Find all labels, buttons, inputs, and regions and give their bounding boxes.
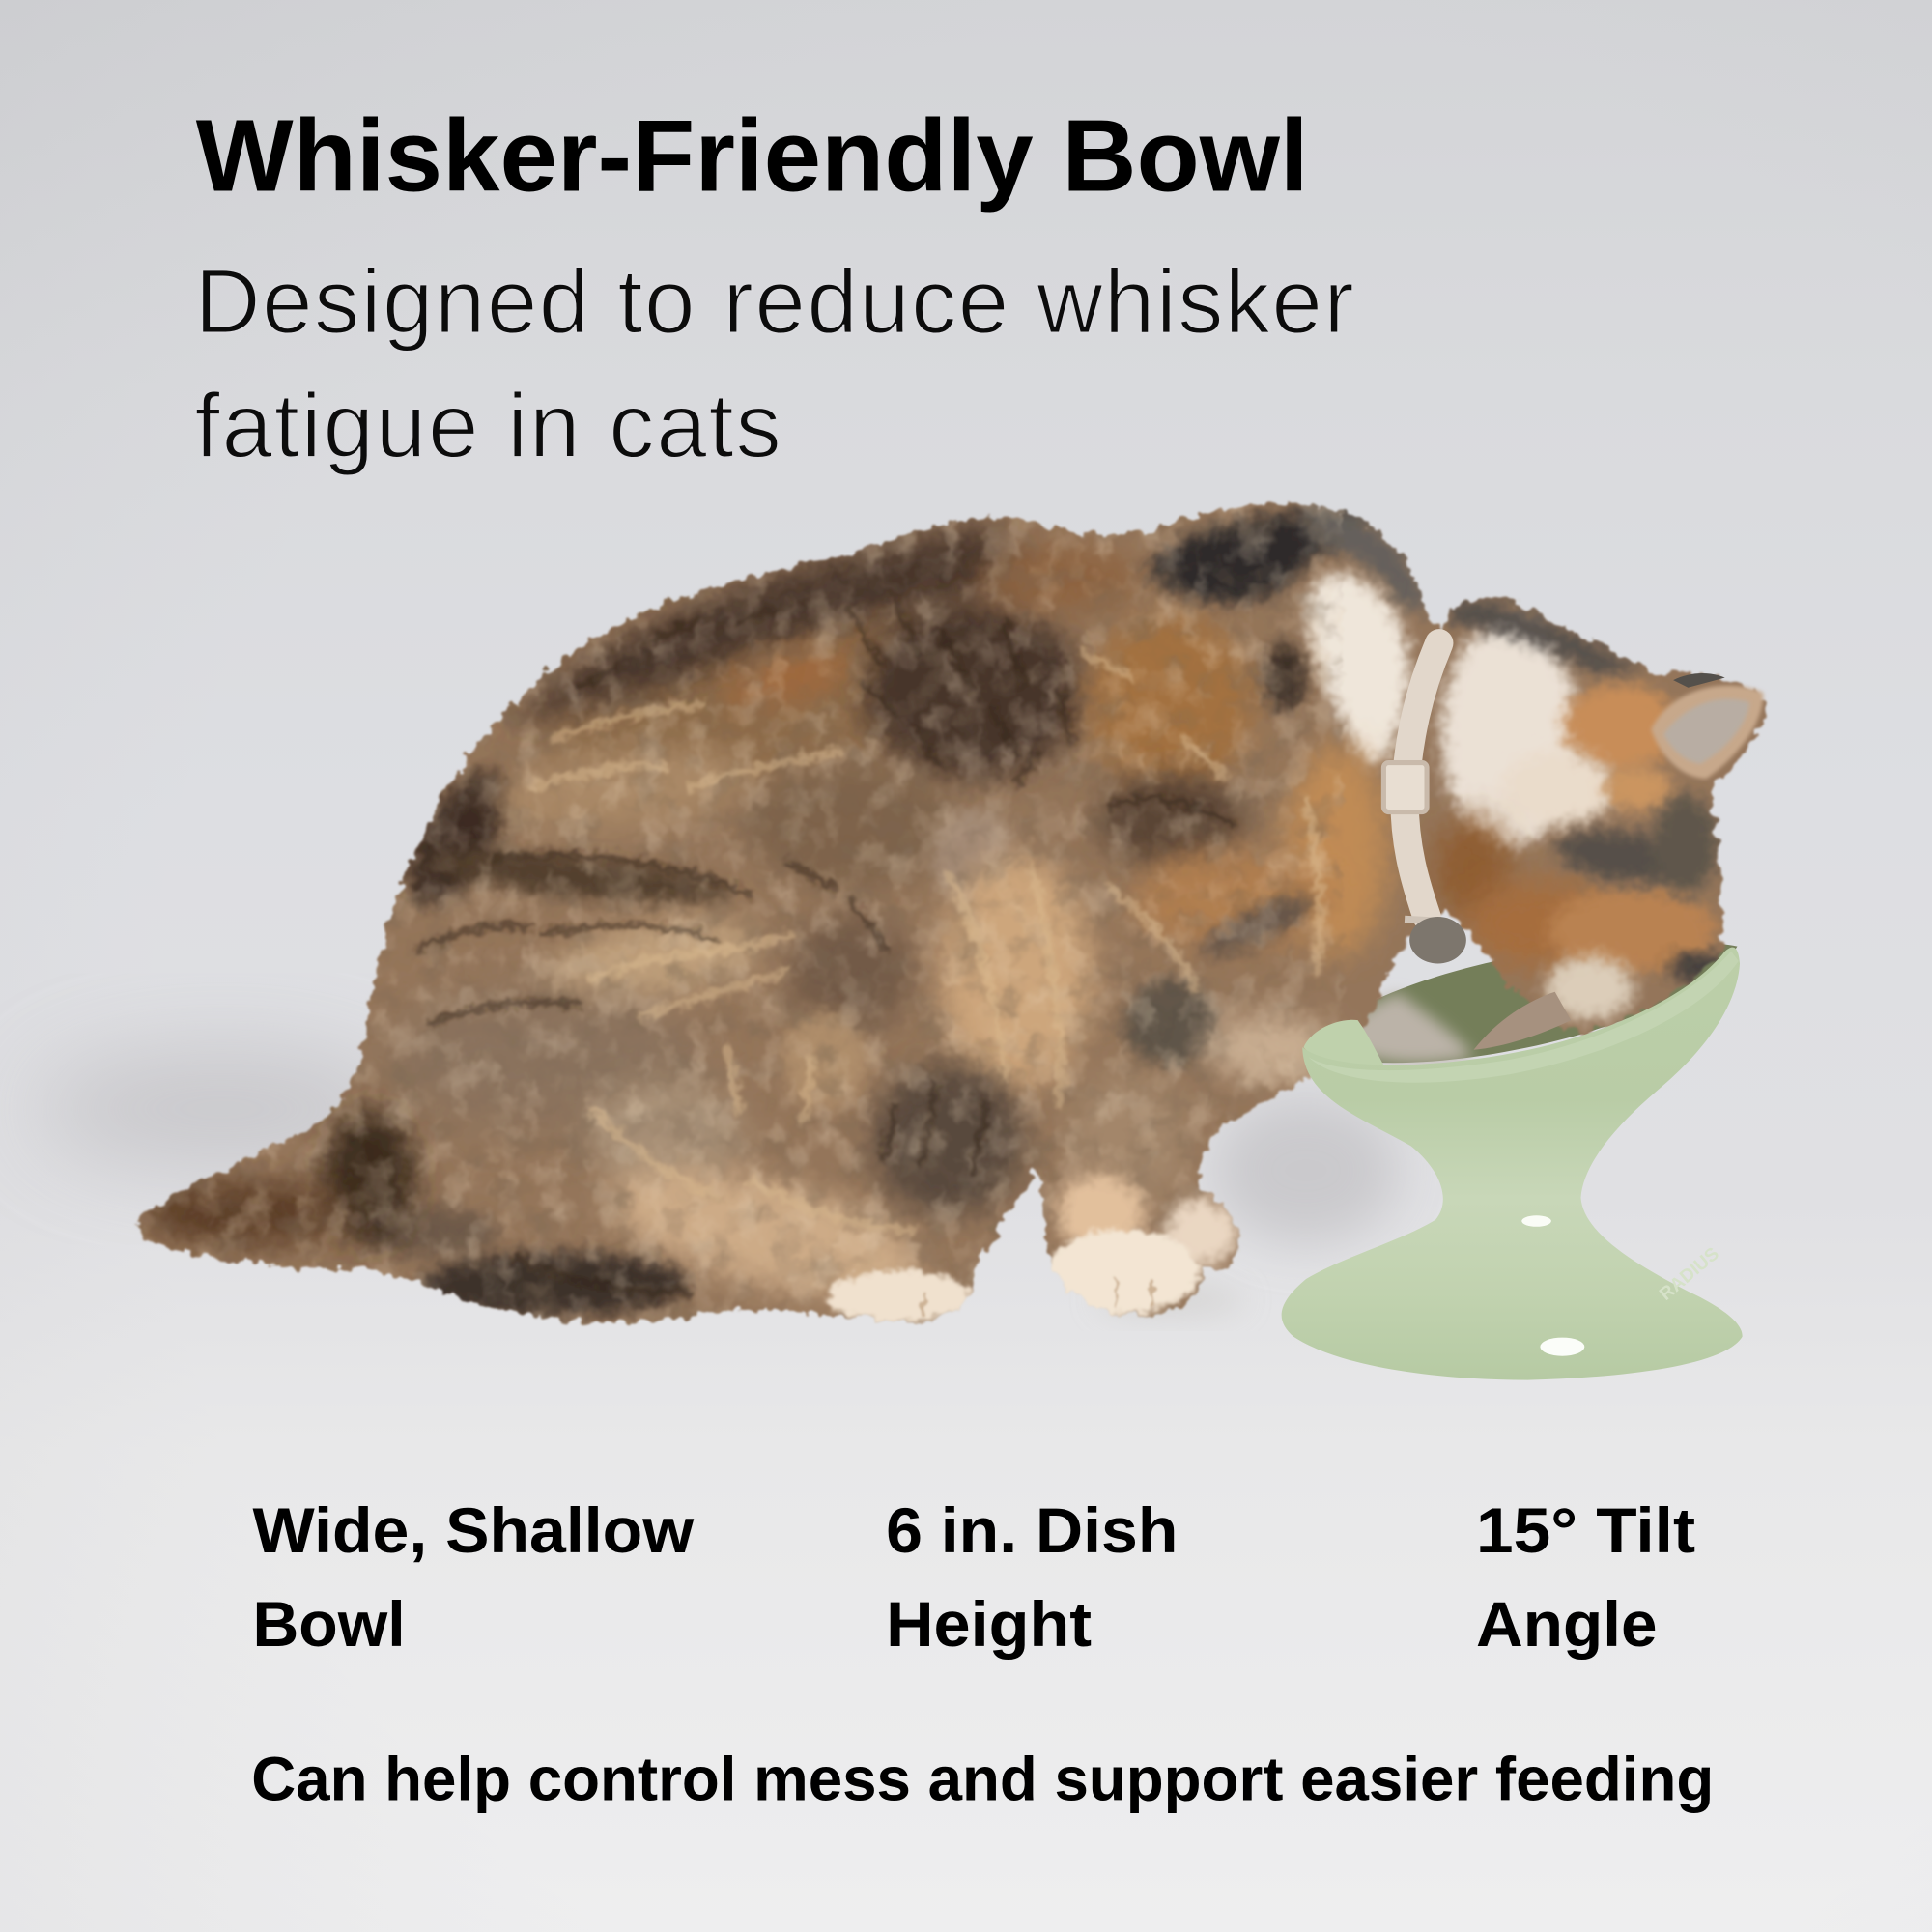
subtitle: fatigue in cats [195, 376, 781, 477]
subtitle: Designed to reduce whisker [195, 251, 1354, 353]
fur base colour [111, 480, 1786, 1343]
feature: wide shallow bowl: Wide, Shallow [252, 1495, 695, 1567]
feature: dish height: Height [886, 1589, 1092, 1661]
ear [1651, 673, 1763, 779]
title: Whisker-Friendly Bowl [196, 99, 1309, 213]
bowl interior [1302, 943, 1737, 1063]
collar with buckle and bell [1383, 643, 1466, 963]
cast shadows on the floor [37, 1047, 1399, 1318]
bowl food [1474, 992, 1571, 1050]
feature: dish height [886, 1495, 1178, 1661]
subtitle [195, 251, 1354, 477]
bowl highlights [1521, 1215, 1584, 1356]
feature: tilt angle [1476, 1495, 1695, 1661]
feature: wide shallow bowl [252, 1495, 695, 1661]
cat [111, 480, 1786, 1343]
feature: wide shallow bowl: Bowl [252, 1589, 406, 1661]
bowl brand mark: RADIUS [1656, 1243, 1723, 1305]
green tilted bowl [1282, 948, 1743, 1380]
head: neck and face colour patches [1433, 599, 1727, 1020]
fur strands [419, 598, 1320, 1293]
closing benefit line: Can help control mess and support easier feeding [251, 1745, 1714, 1814]
feature: tilt angle: 15° Tilt [1476, 1495, 1695, 1567]
fur texture [111, 480, 1343, 1343]
fur colour patches [142, 505, 1430, 1321]
front leg and paws [828, 1175, 1238, 1322]
feature: dish height: 6 in. Dish [886, 1495, 1178, 1567]
feature: tilt angle: Angle [1476, 1589, 1658, 1661]
